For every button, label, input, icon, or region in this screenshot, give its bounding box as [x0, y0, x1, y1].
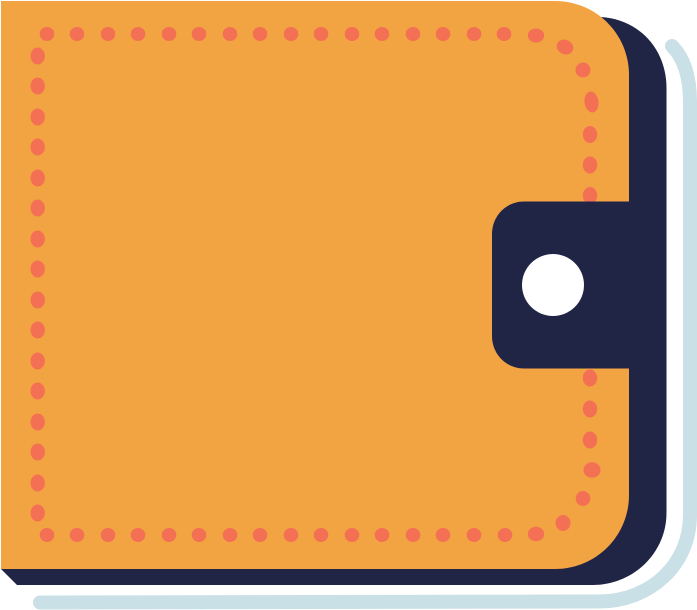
left stitching — [30, 48, 45, 522]
clasp button — [522, 254, 584, 316]
right stitching — [554, 37, 600, 531]
clasp flap — [492, 202, 629, 368]
stitching dots — [30, 27, 600, 542]
top stitching — [40, 27, 544, 42]
bottom stitching — [40, 527, 544, 542]
